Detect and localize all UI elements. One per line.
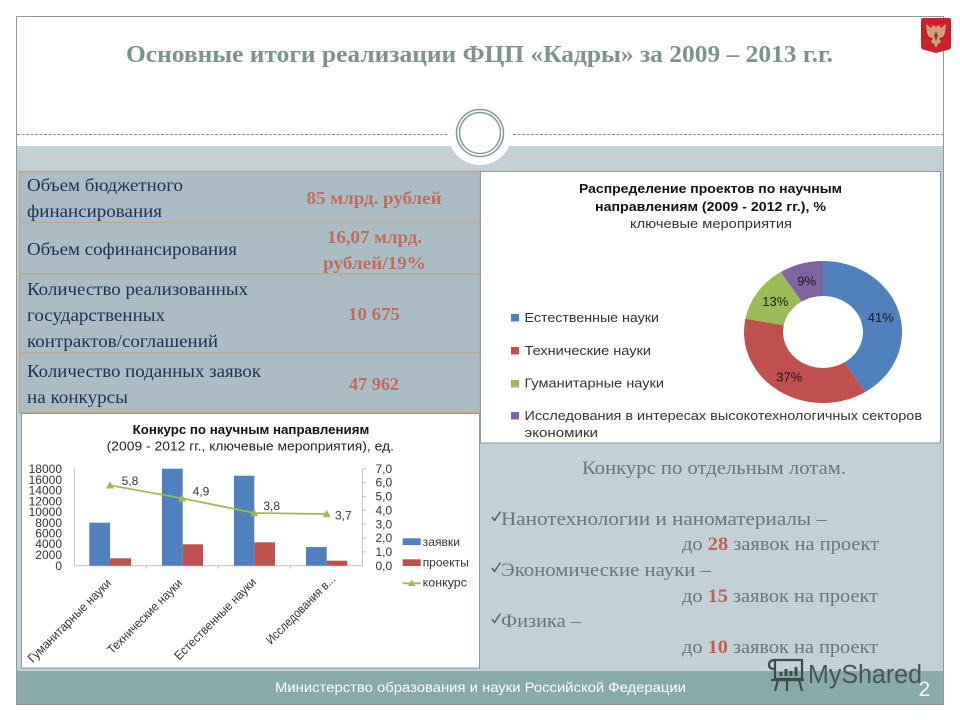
- donut legend: Естественные науки: [524, 311, 659, 325]
- line value labels: [122, 474, 352, 522]
- left axis labels: 6000: [35, 526, 62, 540]
- donut legend: Гуманитарные науки: [524, 376, 664, 390]
- header dashed rule: [17, 134, 943, 136]
- row: contracts: Количество реализованных: [27, 279, 248, 299]
- bar chart legend: проекты: [423, 556, 469, 570]
- donut value labels: 13%: [762, 294, 789, 309]
- donut value labels: 9%: [797, 274, 817, 288]
- right axis labels: 0,0: [376, 559, 393, 573]
- right axis labels: 5,0: [376, 490, 393, 504]
- right axis labels: 2,0: [376, 531, 393, 545]
- right axis labels: [376, 462, 393, 573]
- category labels: Исследования в...: [263, 572, 338, 647]
- left axis labels: 10000: [29, 505, 62, 519]
- bar chart legend: конкурс: [423, 576, 467, 590]
- icon: coat of arms shield: [921, 18, 951, 53]
- chart axes: [74, 469, 366, 569]
- footer bar: [17, 671, 943, 704]
- row: budget financing: Объем бюджетного: [27, 175, 183, 195]
- panel: key figures table: [19, 172, 480, 412]
- line: конкурс: [106, 481, 331, 517]
- row: applications: на конкурсы: [27, 387, 128, 407]
- right axis labels: 6,0: [376, 476, 393, 490]
- donut chart heading: Распределение проектов по научным: [579, 181, 842, 196]
- donut legend: Исследования в интересах высокотехнологичных секторов: [524, 409, 922, 423]
- bullet: economics: до 15 заявок на проект: [682, 587, 878, 607]
- donut value labels: [762, 274, 894, 384]
- row: contracts: государственных: [27, 305, 165, 325]
- left axis labels: 16000: [29, 473, 62, 487]
- row: applications: Количество поданных заявок: [27, 361, 261, 381]
- category labels: Естественные науки: [171, 575, 259, 663]
- line value labels: 4,9: [193, 484, 210, 498]
- bar chart legend: заявки: [423, 535, 460, 549]
- row: budget financing: 85 млрд. рублей: [306, 188, 442, 208]
- bar chart heading: Конкурс по научным направлениям: [133, 423, 369, 437]
- footer text: Министерство образования и науки Российской Федерации: [275, 679, 686, 695]
- bullet: physics: [492, 612, 878, 658]
- row: co-financing: [27, 227, 426, 273]
- row: contracts: 10 675: [348, 304, 400, 324]
- bullet: nanotechnology: Нанотехнологии и наноматериалы –: [501, 510, 828, 530]
- content background band: [17, 146, 943, 671]
- bullet: physics: до 10 заявок на проект: [682, 638, 878, 658]
- panel: donut chart: [480, 172, 940, 443]
- watermark: MyShared: [769, 660, 922, 691]
- text block: competition by lots: Конкурс по отдельным лотам.: [582, 459, 846, 479]
- row: contracts: контрактов/соглашений: [27, 331, 218, 351]
- row: applications: [27, 361, 399, 407]
- icon: circle ornament: [448, 101, 512, 165]
- row: applications: 47 962: [349, 374, 399, 394]
- bullet: economics: Экономические науки –: [501, 561, 712, 581]
- text block: competition by lots: [492, 459, 879, 658]
- donut chart heading: направлениям (2009 - 2012 гг.), %: [595, 199, 826, 214]
- left axis labels: 12000: [29, 494, 62, 508]
- category labels: [25, 572, 338, 665]
- left axis labels: 2000: [35, 548, 62, 562]
- donut legend: Технические науки: [524, 344, 651, 358]
- row: budget financing: [27, 175, 442, 221]
- bar chart heading: [107, 423, 394, 454]
- row: co-financing: 16,07 млрд.: [327, 227, 422, 247]
- line value labels: 5,8: [122, 474, 139, 488]
- right axis labels: 4,0: [376, 504, 393, 518]
- row: co-financing: рублей/19%: [323, 253, 426, 273]
- bullet: physics: Физика –: [501, 612, 582, 632]
- donut chart heading: [579, 181, 842, 231]
- left axis labels: 8000: [35, 516, 62, 530]
- bullet: nanotechnology: до 28 заявок на проект: [682, 535, 879, 555]
- row: budget financing: финансирования: [27, 201, 162, 221]
- watermark: MyShared: MyShared: [808, 661, 922, 689]
- left axis labels: 4000: [35, 537, 62, 551]
- bars: проекты: [110, 542, 347, 566]
- donut segments: [744, 261, 902, 403]
- left axis labels: 18000: [29, 462, 62, 476]
- title: Основные итоги реализации ФЦП «Кадры» за 2009 – 2013 г.г.: [126, 42, 833, 68]
- donut chart heading: ключевые мероприятия: [630, 216, 792, 231]
- donut legend: [511, 311, 922, 440]
- right axis labels: 1,0: [376, 545, 393, 559]
- panel: bar chart: [22, 414, 480, 668]
- line value labels: 3,7: [335, 508, 352, 522]
- row: contracts: [27, 279, 400, 351]
- right axis labels: 7,0: [376, 462, 393, 476]
- donut legend: экономики: [524, 426, 598, 440]
- category labels: Технические науки: [105, 576, 185, 657]
- left axis labels: 0: [55, 559, 62, 573]
- icon: presentation board: [769, 660, 804, 691]
- page number: 2: [918, 678, 930, 701]
- line value labels: 3,8: [263, 499, 280, 513]
- category labels: Гуманитарные науки: [25, 576, 114, 665]
- bullet: nanotechnology: [492, 510, 879, 555]
- bullet: economics: [492, 561, 878, 607]
- right axis labels: 3,0: [376, 518, 393, 532]
- bar chart legend: [403, 535, 469, 590]
- donut value labels: 41%: [868, 310, 894, 325]
- left axis labels: 14000: [29, 484, 62, 498]
- donut value labels: 37%: [776, 370, 803, 384]
- bars: заявки: [89, 469, 327, 566]
- left axis labels: [29, 462, 62, 573]
- row: co-financing: Объем софинансирования: [27, 239, 237, 259]
- bar chart heading: (2009 - 2012 гг., ключевые мероприятия), ед.: [107, 440, 394, 454]
